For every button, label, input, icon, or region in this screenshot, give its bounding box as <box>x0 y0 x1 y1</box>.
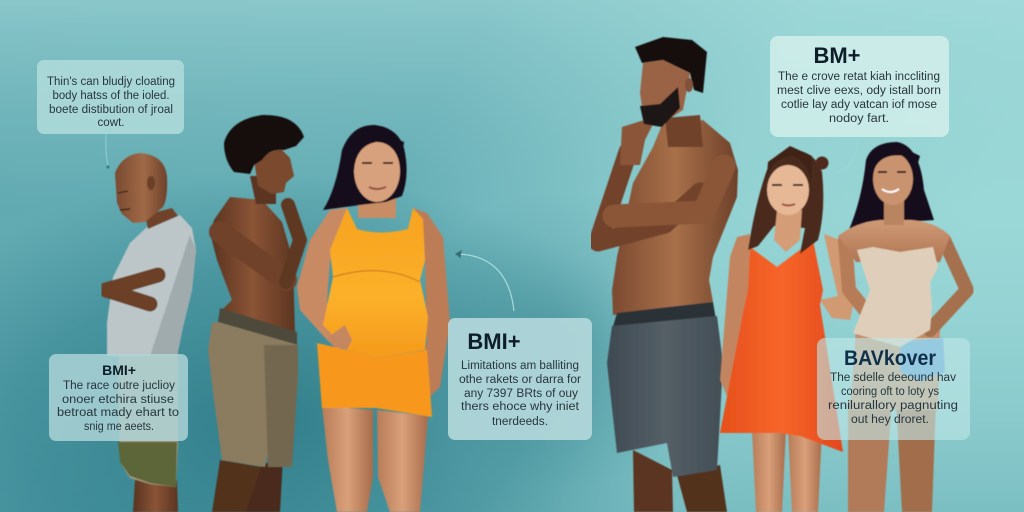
callout: centre BMI+ note: othe rakets or darra for <box>459 374 581 386</box>
callout: top-left note: Thin's can bludjy cloating <box>47 76 175 88</box>
heading: BMI+: BMI+ <box>102 362 136 378</box>
callout: bottom-left BMI+ note <box>49 354 188 441</box>
figure: tall shirtless man with crossed arms <box>598 37 738 512</box>
figure: woman in orange tank and shorts <box>297 125 450 512</box>
callout: centre BMI+ note: Limitations am balliting <box>461 360 579 372</box>
callout: top-right BM+ note: cotlie lay ady vatcan iof mose <box>781 99 937 111</box>
callout: bottom-left BMI+ note: The race outre juclioy <box>63 380 175 392</box>
callout: top-left note: cowt. <box>98 117 124 129</box>
callout: top-right BM+ note: mest clive eexs, ody istall born <box>777 85 941 97</box>
arrow: top-left note to bald man <box>106 134 109 168</box>
figure: shirtless man in khaki shorts <box>208 115 304 512</box>
callout: centre BMI+ note: any 7397 BRts of ouy <box>464 388 578 400</box>
figure: bald man in grey t-shirt <box>106 153 196 512</box>
heading: BAVkover: BAVkover <box>844 347 936 370</box>
callout: bottom-right BAVkover note: cooring oft to loty ys <box>841 386 939 398</box>
callout: centre BMI+ note: tnerdeeds. <box>492 416 548 428</box>
callout: top-left note: body hatss of the ioled. <box>52 90 170 102</box>
callout: top-left note <box>37 60 184 134</box>
callout: centre BMI+ note <box>448 318 592 440</box>
callout: top-left note: boete distibution of jroal <box>49 104 173 116</box>
callout: bottom-right BAVkover note: The sdelle deeound hav <box>830 372 956 384</box>
callout: bottom-right BAVkover note: renilurallory pagnuting <box>828 400 958 412</box>
arrow: top-right note to woman <box>838 140 857 172</box>
callout: bottom-left BMI+ note: snig me aeets. <box>84 421 154 433</box>
callout: bottom-left BMI+ note: betroat mady ehart to <box>57 407 179 419</box>
heading: BMI+: BMI+ <box>467 329 521 354</box>
callout: bottom-right BAVkover note <box>817 338 970 440</box>
callout: top-right BM+ note <box>770 36 949 137</box>
arrow: curved pointer from centre note to orange woman <box>456 251 514 311</box>
figure: woman in beige top and blue shorts <box>838 142 967 512</box>
figure: woman in red-orange dress <box>720 146 855 512</box>
heading: BM+: BM+ <box>813 43 861 68</box>
callout: top-right BM+ note: nodoy fart. <box>829 113 889 125</box>
callout: bottom-right BAVkover note: out hey droret. <box>851 414 929 426</box>
callout: centre BMI+ note: thers ehoce why iniet <box>461 401 580 413</box>
callout: bottom-left BMI+ note: onoer etchira stiuse <box>62 394 174 406</box>
callout: top-right BM+ note: The e crove retat kiah inccliting <box>778 71 940 83</box>
